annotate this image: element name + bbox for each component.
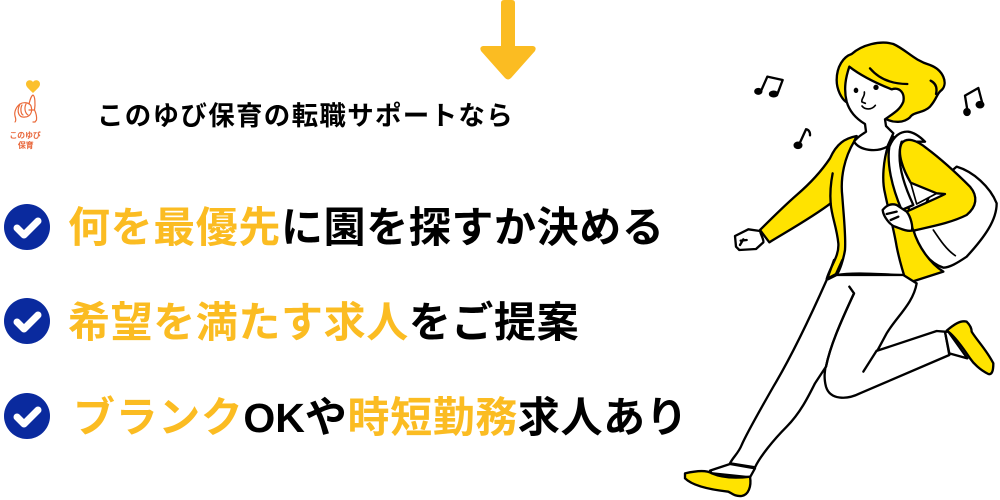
logo — [10, 80, 41, 150]
right cardigan front — [883, 137, 943, 283]
left shoe — [685, 471, 750, 496]
left hand — [735, 229, 763, 250]
logo hand — [15, 95, 37, 122]
arrow — [480, 0, 536, 80]
right hand — [883, 204, 912, 231]
item 2 text: 希望を満たす求人をご提案 — [68, 299, 579, 346]
hair — [837, 43, 945, 122]
right sock — [945, 332, 967, 358]
item 1 check icon — [4, 204, 50, 250]
logo text: 保育 — [18, 140, 34, 150]
item 1 text: 何を最優先に園を探すか決める — [68, 204, 664, 251]
right leg — [825, 275, 949, 398]
music notes — [755, 77, 983, 148]
heading: このゆび保育の転職サポートなら — [97, 101, 514, 131]
face — [845, 67, 904, 150]
item 3 check icon — [4, 393, 50, 439]
logo heart — [26, 80, 40, 93]
left sleeve and cardigan front — [760, 136, 857, 279]
item 3 text: ブランクOKや時短勤務求人あり — [73, 394, 688, 441]
logo text: このゆび — [10, 130, 41, 140]
fringe — [870, 68, 936, 94]
bag strap — [889, 132, 925, 210]
trouser lines — [826, 293, 877, 372]
right sleeve — [900, 140, 975, 231]
right shoe — [947, 321, 993, 374]
left leg — [730, 280, 854, 467]
eyes, nose, mouth — [854, 85, 879, 109]
left sock — [710, 464, 755, 477]
shirt and bag — [827, 142, 997, 280]
item 2 check icon — [4, 298, 50, 344]
